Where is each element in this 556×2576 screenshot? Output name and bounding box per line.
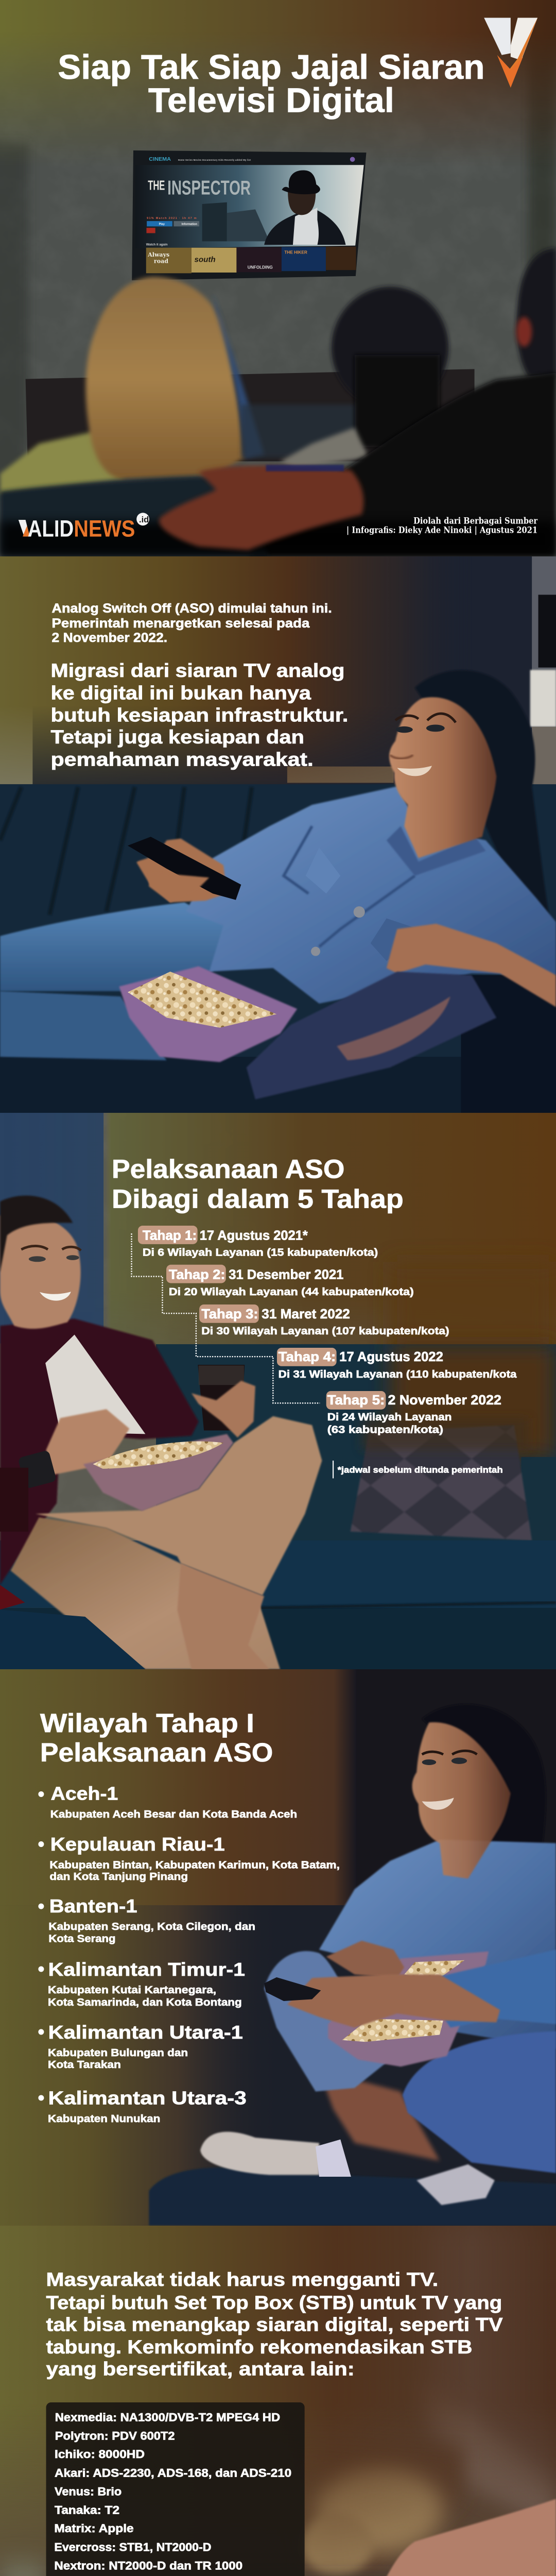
- statement: tabung. Kemkominfo rekomendasikan STB: [46, 2336, 472, 2358]
- knee and thigh: [319, 2070, 440, 2161]
- icon: wall-mounted TV showing The Inspector: Play: [159, 223, 165, 226]
- statement: [46, 2268, 503, 2380]
- stage 1: 17 Agustus 2021*: [200, 1229, 308, 1243]
- heading: [40, 1708, 273, 1767]
- region: Banten-1: Kota Serang: [48, 1933, 116, 1945]
- figure: woman on the sofa: [0, 670, 556, 1060]
- intro text: 2 November 2022.: [52, 631, 167, 645]
- figure: smiling man: [0, 1196, 322, 1669]
- sofa and pillow: [0, 1344, 556, 1669]
- region: Kalimantan Timur-1: Kabupaten Kutai Kartanegara,: [48, 1984, 216, 1996]
- panel: certified STB list: Nextron: NT2000-D dan TR 1000: [54, 2559, 242, 2572]
- title: [58, 48, 485, 120]
- heading: [112, 1155, 404, 1214]
- icon: wall-mounted TV showing The Inspector: 91% Match 2021 · 1h 47 m: [147, 217, 197, 220]
- region: Kepulauan Riau-1: Kabupaten Bintan, Kabupaten Karimun, Kota Batam,: [49, 1859, 340, 1871]
- stage 5: Tahap 5:: [327, 1393, 385, 1408]
- man in hat on the TV: [264, 171, 346, 245]
- stage 4: [277, 1348, 517, 1380]
- region: Kalimantan Utara-3: [38, 2088, 247, 2125]
- panel: certified STB list: Ichiko: 8000HD: [55, 2448, 145, 2461]
- icon: wall-mounted TV showing The Inspector: THE: [148, 177, 165, 193]
- panel: set top box, hand with remote: [0, 2226, 556, 2576]
- hand holding remote: [358, 2499, 556, 2576]
- panel: certified STB list: Polytron: PDV 600T2: [55, 2429, 175, 2442]
- icon: wall-mounted TV showing The Inspector: UNFOLDING: [248, 265, 273, 269]
- region: Banten-1: Banten-1: [49, 1896, 137, 1917]
- icon: wall-mounted TV showing The Inspector: THE HIKER: [284, 250, 307, 255]
- hair: [415, 670, 550, 919]
- region: Kalimantan Utara-1: Kota Tarakan: [48, 2059, 121, 2071]
- figure: woman cross-legged: [200, 1704, 556, 2205]
- region: Banten-1: Kabupaten Serang, Kota Cilegon, dan: [48, 1921, 255, 1933]
- blurred background shapes: [0, 2226, 556, 2576]
- statement: Tetapi butuh Set Top Box (STB) untuk TV yang: [46, 2292, 502, 2313]
- footnote: *jadwal sebelum ditunda pemerintah: [338, 1465, 503, 1475]
- region: Aceh-1: Kabupaten Aceh Besar dan Kota Banda Aceh: [50, 1808, 297, 1820]
- intro text: Pemerintah menargetkan selesai pada: [52, 617, 310, 631]
- stage 3: 31 Maret 2022: [262, 1307, 350, 1321]
- stage 4: Di 31 Wilayah Layanan (110 kabupaten/kota: [279, 1369, 517, 1380]
- stage 4: Tahap 4:: [279, 1350, 336, 1364]
- icon: popcorn bowl: [119, 967, 297, 1062]
- panel: stage 1 regions, woman cross-legged: [0, 1669, 556, 2226]
- heading: Dibagi dalam 5 Tahap: [112, 1184, 404, 1214]
- panel: hero, family watching TV: [0, 0, 556, 556]
- stage 3: [199, 1304, 449, 1337]
- figure: child's dark head: [241, 287, 448, 468]
- credit text: [346, 516, 537, 535]
- stage 2: 31 Desember 2021: [229, 1267, 343, 1282]
- heading: Wilayah Tahap I: [40, 1708, 254, 1738]
- denim jacket: [186, 786, 556, 1004]
- icon: wall-mounted TV showing The Inspector: Watch it again: [146, 243, 168, 247]
- hands and remote: [264, 1941, 556, 2028]
- dotted timeline connector: [132, 1233, 320, 1403]
- region: Kalimantan Utara-3: Kalimantan Utara-3: [48, 2088, 247, 2108]
- main statement: ke digital ini bukan hanya: [50, 682, 311, 704]
- shoes: [200, 2132, 319, 2175]
- credit text: Diolah dari Berbagai Sumber: [413, 516, 537, 526]
- title: Siap Tak Siap Jajal Siaran: [58, 48, 485, 87]
- figure: blonde woman seen from behind: [0, 277, 264, 495]
- stage 5: (63 kabupaten/kota): [327, 1424, 443, 1435]
- figure: man's silhouette on the right: [248, 248, 556, 556]
- region: Aceh-1: Aceh-1: [50, 1783, 118, 1804]
- panel: certified STB list: Venus: Brio: [55, 2485, 121, 2498]
- logo: Validnews.id: [19, 513, 149, 541]
- tan trousers: [36, 1416, 322, 1596]
- main statement: butuh kesiapan infrastruktur.: [50, 704, 348, 725]
- main statement: [50, 659, 348, 770]
- panel: certified STB list: Matrix: Apple: [54, 2522, 134, 2535]
- stage 2: Di 20 Wilayah Layanan (44 kabupaten/kota): [169, 1286, 414, 1298]
- legs in jeans: [0, 903, 227, 991]
- heading: Pelaksanaan ASO: [40, 1738, 273, 1767]
- stage 1: [138, 1226, 378, 1259]
- stage 2: [166, 1265, 414, 1298]
- region: Kalimantan Utara-1: [38, 2022, 243, 2071]
- panel: certified STB list: Tanaka: T2: [55, 2503, 119, 2516]
- stage 1: Di 6 Wilayah Layanan (15 kabupaten/kota): [143, 1247, 378, 1259]
- statement: Masyarakat tidak harus mengganti TV.: [46, 2268, 438, 2290]
- logo: Validnews.id: .id: [139, 515, 149, 524]
- region: Kalimantan Timur-1: Kalimantan Timur-1: [48, 1959, 245, 1980]
- panel: certified STB list: Evercross: STB1, NT2000-D: [54, 2541, 212, 2554]
- stage 5: 2 November 2022: [388, 1393, 501, 1408]
- title: Televisi Digital: [148, 82, 394, 120]
- region: Kalimantan Utara-1: Kalimantan Utara-1: [48, 2022, 243, 2043]
- panel: certified STB list: Akari: ADS-2230, ADS-168, dan ADS-210: [55, 2467, 291, 2480]
- stage 5: Di 24 Wilayah Layanan: [327, 1412, 451, 1423]
- sofa seat: [149, 2167, 556, 2226]
- stage 5: [326, 1391, 501, 1435]
- main statement: Tetapi juga kesiapan dan: [50, 726, 304, 748]
- stage 2: Tahap 2:: [169, 1267, 225, 1282]
- credit text: | Infografis: Dieky Ade Ninoki | Agustus 2021: [346, 525, 537, 535]
- region: Kepulauan Riau-1: [38, 1834, 340, 1883]
- sofa: [0, 784, 556, 1113]
- region: Kalimantan Utara-3: Kabupaten Nunukan: [48, 2113, 160, 2125]
- icon: popcorn bowl: [328, 1952, 489, 2066]
- icon: wall-mounted TV showing The Inspector: Home Series Movies Documentary Kids Recently added My list: [178, 159, 251, 161]
- figure: hand on shoulder: [159, 466, 363, 550]
- panel: ASO five stages, man with popcorn: [0, 1113, 556, 1669]
- pillow: [247, 972, 496, 1099]
- sideboard below the TV: [26, 369, 475, 461]
- statement: yang bersertifikat, antara lain:: [46, 2358, 355, 2380]
- panel: certified STB list: [46, 2402, 305, 2576]
- region: Kalimantan Timur-1: [38, 1959, 245, 2008]
- icon: wall-mounted TV showing The Inspector: Always: [147, 251, 169, 258]
- region: Aceh-1: [38, 1783, 297, 1820]
- face and neck: [389, 697, 496, 858]
- intro text: [52, 602, 332, 645]
- sofa back and arm foreground: [0, 476, 269, 556]
- icon: wall-mounted TV showing The Inspector: [132, 150, 367, 280]
- stage 1: Tahap 1:: [143, 1229, 197, 1243]
- panel: woman with remote, ASO introduction: [0, 556, 556, 1113]
- icon: wall-mounted TV showing The Inspector: road: [154, 258, 168, 264]
- main statement: pemahaman masyarakat.: [50, 748, 314, 770]
- stage 4: 17 Agustus 2022: [339, 1350, 443, 1364]
- icon: wall-mounted TV showing The Inspector: south: [194, 255, 216, 264]
- region: Kepulauan Riau-1: Kepulauan Riau-1: [50, 1834, 225, 1855]
- region: Kalimantan Utara-1: Kabupaten Bulungan dan: [48, 2047, 188, 2059]
- hand with remote: [136, 839, 227, 903]
- region: Kalimantan Timur-1: Kota Samarinda, dan Kota Bontang: [48, 1996, 242, 2008]
- statement: tak bisa menangkap siaran digital, seperti TV: [46, 2314, 503, 2335]
- stage 3: Tahap 3:: [201, 1307, 258, 1321]
- icon: wall-mounted TV showing The Inspector: CINEMA: [149, 157, 171, 162]
- stage 3: Di 30 Wilayah Layanan (107 kabupaten/kota): [201, 1326, 449, 1337]
- main statement: Migrasi dari siaran TV analog: [50, 659, 344, 681]
- panel: certified STB list: Nexmedia: NA1300/DVB-T2 MPEG4 HD: [55, 2411, 280, 2424]
- intro text: Analog Switch Off (ASO) dimulai tahun ini.: [52, 602, 332, 616]
- hand on pillow: [387, 924, 556, 1007]
- icon: V logo: [484, 18, 537, 88]
- icon: popcorn bowl: [83, 1434, 233, 1511]
- icon: wall-mounted TV showing The Inspector: Information: [182, 223, 198, 226]
- logo: Validnews.id: ALID: [28, 515, 74, 541]
- heading: Pelaksanaan ASO: [112, 1155, 344, 1184]
- icon: wall-mounted TV showing The Inspector: INSPECTOR: [167, 177, 251, 199]
- logo: Validnews.id: NEWS: [74, 515, 135, 541]
- region: Banten-1: [38, 1896, 255, 1945]
- region: Kepulauan Riau-1: dan Kota Tanjung Pinang: [49, 1871, 188, 1883]
